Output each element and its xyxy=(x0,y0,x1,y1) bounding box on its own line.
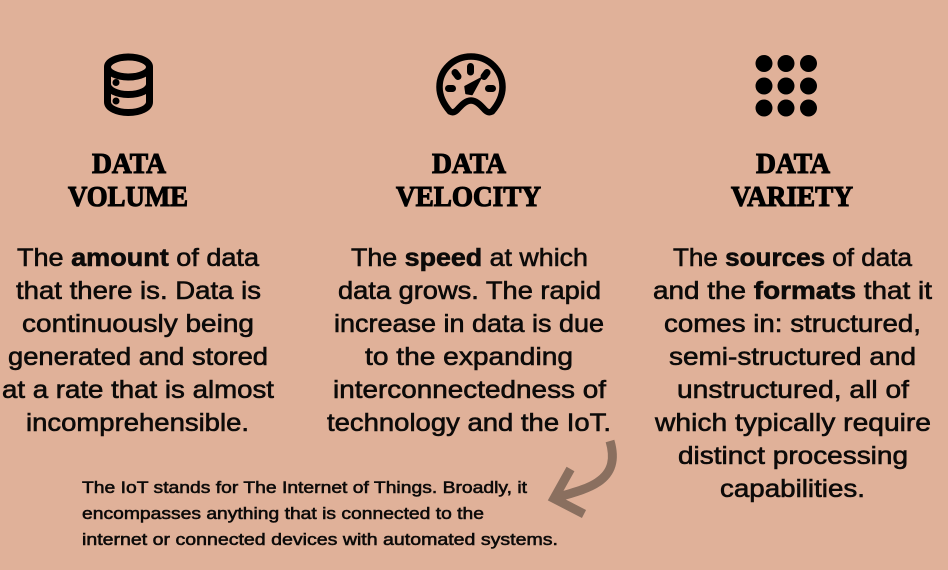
text: data volume description xyxy=(2,244,274,437)
text: data velocity description: data grows. The rapid xyxy=(338,277,601,305)
text: data variety description: which typically require xyxy=(654,409,931,437)
text: data variety description: semi-structured and xyxy=(669,343,916,371)
heading: data velocity: DATA xyxy=(432,148,506,180)
heading: data velocity: VELOCITY xyxy=(396,181,541,213)
text: data variety description xyxy=(653,244,932,503)
text: data velocity description xyxy=(327,244,611,437)
text: data variety description: and the formats that it xyxy=(653,277,932,305)
callout: IoT footnote: encompasses anything that is connected to the xyxy=(82,505,484,523)
text: data volume description: continuously being xyxy=(22,310,254,338)
icon: database xyxy=(108,57,150,112)
heading: data volume: DATA xyxy=(92,148,166,180)
text: data volume description: incomprehensible. xyxy=(26,409,249,437)
text: data velocity description: increase in data is due xyxy=(334,310,604,338)
heading: data velocity xyxy=(396,148,541,213)
text: data velocity description: technology and the IoT. xyxy=(327,409,611,437)
text: data variety description: The sources of data xyxy=(673,244,912,272)
heading: data variety xyxy=(731,148,853,213)
icon: speedometer gauge xyxy=(440,56,502,112)
text: data variety description: distinct processing xyxy=(678,442,908,470)
heading: data volume: VOLUME xyxy=(68,181,188,213)
text: data velocity description: The speed at which xyxy=(351,244,588,272)
text: data variety description: comes in: structured, xyxy=(664,310,921,338)
text: data volume description: The amount of data xyxy=(17,244,259,272)
heading: data volume xyxy=(68,148,188,213)
text: data volume description: that there is. Data is xyxy=(16,277,261,305)
heading: data variety: DATA xyxy=(756,148,830,180)
arrow: curved pointer to footnote xyxy=(554,441,612,514)
callout: IoT footnote: The IoT stands for The Internet of Things. Broadly, it xyxy=(82,479,527,497)
panel: data velocity xyxy=(327,56,611,437)
callout: IoT footnote xyxy=(82,479,558,549)
callout: IoT footnote: internet or connected devices with automated systems. xyxy=(82,531,558,549)
panel: data variety xyxy=(653,55,932,503)
text: data volume description: generated and stored xyxy=(8,343,268,371)
icon: nine dots grid xyxy=(756,55,817,116)
panel: data volume xyxy=(2,57,274,437)
text: data volume description: at a rate that is almost xyxy=(2,376,274,404)
text: data velocity description: interconnectedness of xyxy=(333,376,606,404)
heading: data variety: VARIETY xyxy=(731,181,853,213)
text: data variety description: capabilities. xyxy=(720,475,865,503)
text: data velocity description: to the expanding xyxy=(365,343,573,371)
text: data variety description: unstructured, all of xyxy=(677,376,909,404)
